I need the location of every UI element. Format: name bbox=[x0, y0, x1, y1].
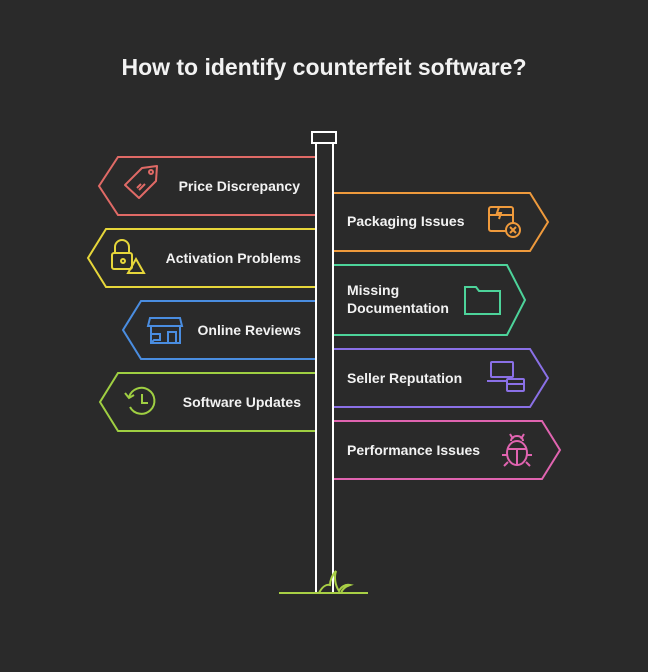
sign: online reviews: Online Reviews bbox=[198, 322, 301, 338]
icon: lock with warning bbox=[112, 240, 144, 273]
sign: packaging issues: Packaging Issues bbox=[347, 213, 465, 229]
sign: performance issues bbox=[332, 421, 560, 479]
sign: missing documentation bbox=[332, 265, 525, 335]
signpost pole bbox=[312, 132, 336, 593]
sign: seller reputation bbox=[332, 349, 548, 407]
sign: activation problems: Activation Problems bbox=[166, 250, 301, 266]
sign: seller reputation: Seller Reputation bbox=[347, 370, 462, 386]
sign: performance issues: Performance Issues bbox=[347, 442, 480, 458]
sign: price discrepancy bbox=[99, 157, 316, 215]
sign: missing documentation: Documentation bbox=[347, 300, 449, 316]
sign: online reviews bbox=[123, 301, 316, 359]
icon: laptop with card bbox=[487, 362, 524, 391]
sign: software updates bbox=[100, 373, 316, 431]
icon: damaged box bbox=[489, 207, 520, 237]
sign: missing documentation: Missing bbox=[347, 282, 399, 298]
icon: price tag bbox=[125, 166, 157, 198]
title: How to identify counterfeit software? bbox=[121, 54, 527, 80]
grass bbox=[279, 571, 368, 593]
sign: software updates: Software Updates bbox=[183, 394, 301, 410]
icon: folder bbox=[465, 287, 500, 314]
icon: history clock bbox=[125, 388, 154, 414]
sign: price discrepancy: Price Discrepancy bbox=[179, 178, 300, 194]
sign: packaging issues bbox=[332, 193, 548, 251]
icon: bug bbox=[502, 434, 532, 466]
icon: store bbox=[148, 318, 182, 343]
sign: activation problems bbox=[88, 229, 316, 287]
